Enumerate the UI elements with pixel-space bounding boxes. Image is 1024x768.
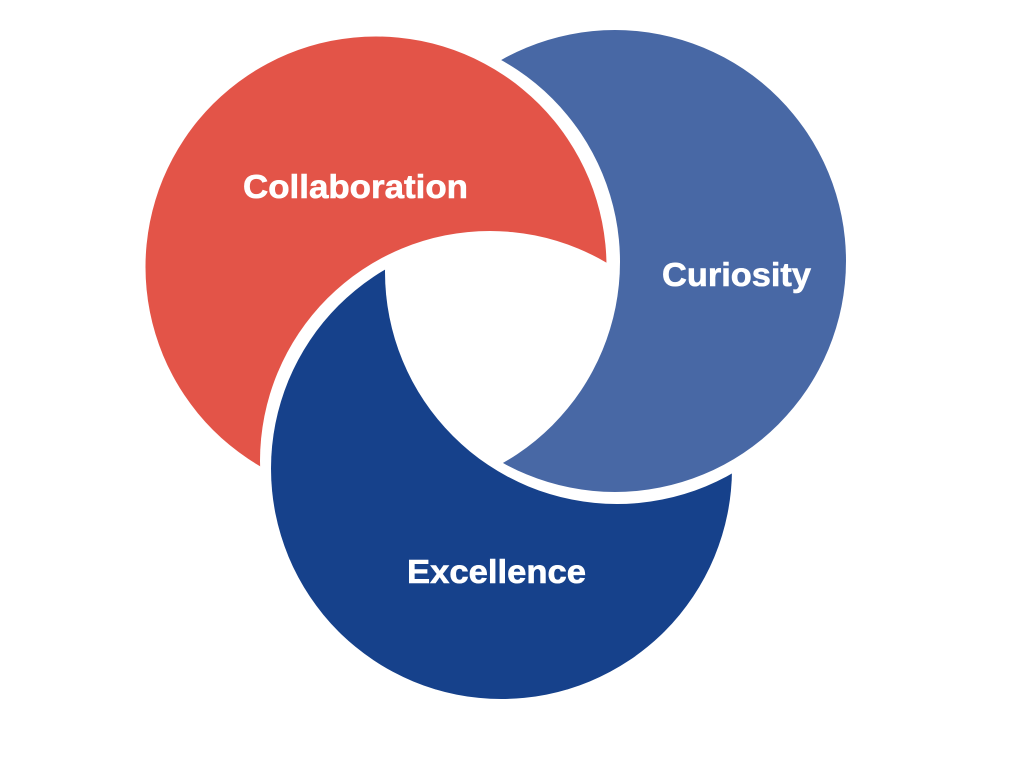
interlocking three-circle diagram: [146, 30, 846, 699]
segment: Collaboration: [146, 36, 606, 498]
segment: Excellence: [271, 238, 732, 699]
label: Excellence: Excellence: [407, 553, 586, 590]
label: Collaboration: Collaboration: [243, 168, 468, 205]
segment: Curiosity: [501, 30, 846, 492]
label: Curiosity: Curiosity: [662, 256, 812, 293]
